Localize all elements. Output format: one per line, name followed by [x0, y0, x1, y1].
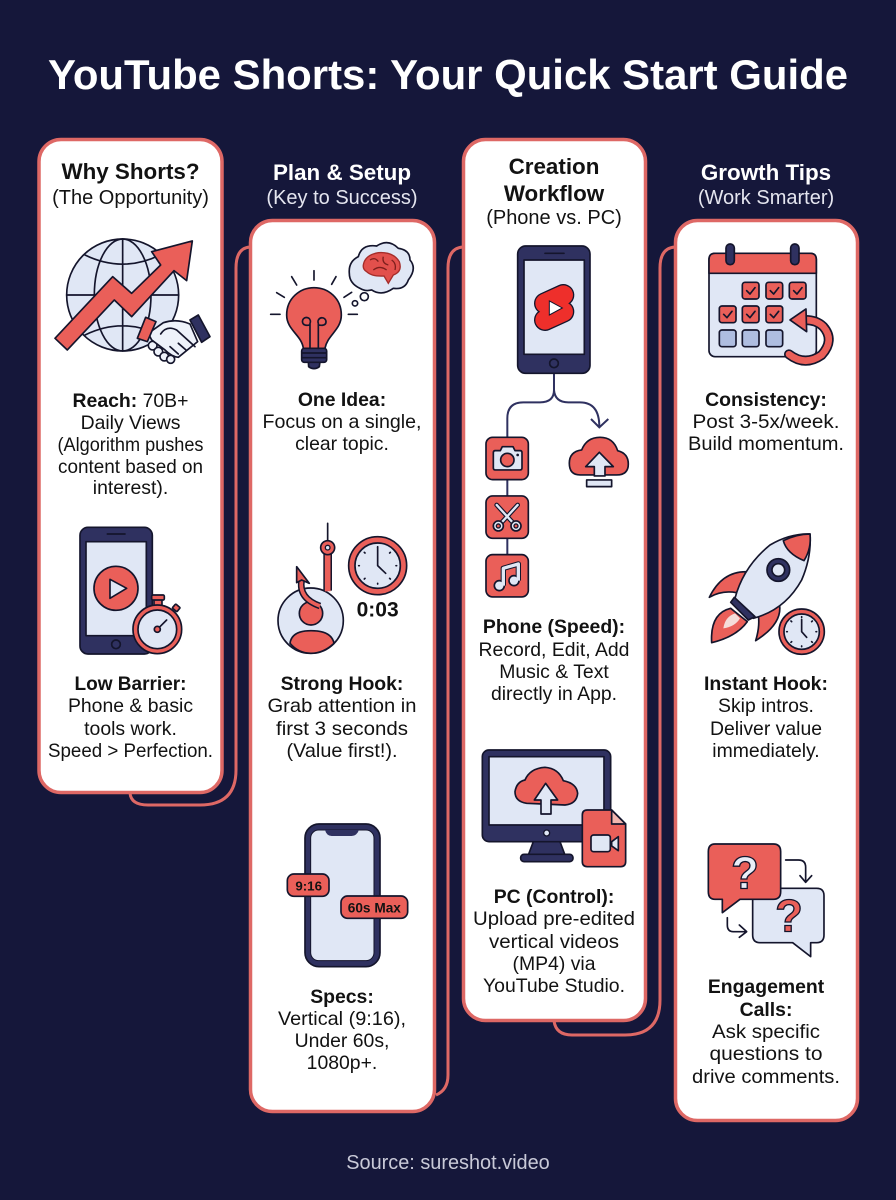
- text: phone speed: Phone (Speed):: [483, 616, 625, 638]
- heading: (Work Smarter): [698, 187, 834, 209]
- panel: plan and setup: [250, 160, 463, 1112]
- heading: [698, 160, 834, 209]
- text: engagement calls: Calls:: [740, 999, 792, 1021]
- panel: creation workflow: [464, 140, 675, 1035]
- text: consistency: [688, 389, 844, 455]
- text: specs: Under 60s,: [295, 1030, 389, 1052]
- heading: Why Shorts?: [61, 159, 200, 184]
- icon: question speech bubbles: ?: [775, 891, 803, 942]
- icon: question speech bubbles: ?: [731, 847, 759, 898]
- connector to creation workflow: [436, 247, 463, 1095]
- text: consistency: Build momentum.: [688, 433, 844, 455]
- heading: Plan & Setup: [273, 160, 411, 185]
- text: strong hook: (Value first!).: [286, 740, 398, 762]
- card: [39, 140, 222, 792]
- text: reach: (Algorithm pushes: [58, 434, 204, 456]
- text: instant hook: immediately.: [712, 740, 820, 762]
- text: one idea: [262, 389, 422, 455]
- text: reach: interest).: [93, 477, 168, 499]
- text: strong hook: [268, 673, 416, 762]
- icon: desktop monitor with cloud upload and video file: [482, 750, 626, 867]
- text: one idea: One Idea:: [298, 389, 386, 411]
- text: instant hook: Skip intros.: [718, 695, 814, 717]
- text: engagement calls: drive comments.: [692, 1066, 840, 1088]
- text: low barrier: Speed > Perfection.: [48, 740, 213, 762]
- text: pc control: (MP4) via: [513, 953, 596, 975]
- text: engagement calls: Ask specific: [712, 1021, 820, 1043]
- panel: why shorts: [39, 140, 250, 805]
- card: [676, 220, 858, 1120]
- title: YouTube Shorts: Your Quick Start Guide: [48, 51, 848, 98]
- text: low barrier: Phone & basic: [68, 695, 193, 717]
- heading: Creation: [509, 154, 599, 179]
- text: specs: Vertical (9:16),: [278, 1008, 406, 1030]
- text: one idea: clear topic.: [295, 433, 389, 455]
- card: [464, 140, 646, 1020]
- text: instant hook: [704, 673, 828, 762]
- heading: (Phone vs. PC): [486, 207, 622, 229]
- text: phone speed: [479, 616, 629, 705]
- text: pc control: vertical videos: [489, 931, 619, 953]
- text: engagement calls: Engagement: [708, 976, 825, 998]
- icon: hook, person and clock: 0:03: [357, 599, 399, 622]
- connector to plan and setup: [130, 247, 250, 805]
- connector to growth tips: [554, 247, 675, 1035]
- icon: rocket with clock: [709, 534, 824, 654]
- icon: vertical phone specs: 9:16: [295, 878, 322, 893]
- text: one idea: Focus on a single,: [262, 411, 422, 433]
- text: instant hook: Deliver value: [710, 718, 822, 740]
- icon: globe with rising arrow and handshake: [55, 239, 210, 363]
- heading: [266, 160, 418, 209]
- text: instant hook: Instant Hook:: [704, 673, 828, 695]
- text: consistency: Post 3-5x/week.: [692, 411, 840, 433]
- text: specs: Specs:: [310, 986, 374, 1008]
- icon: phone workflow with shorts logo, tools and upload: [486, 246, 628, 597]
- text: engagement calls: questions to: [710, 1043, 822, 1065]
- text: low barrier: Low Barrier:: [74, 673, 186, 695]
- text: engagement calls: [692, 976, 840, 1088]
- panel: growth tips: [676, 160, 858, 1120]
- text: specs: 1080p+.: [307, 1052, 377, 1074]
- text: reach: [58, 390, 204, 499]
- icon: calendar with checkmarks and return arrow: [709, 244, 829, 361]
- text: reach: content based on: [58, 456, 203, 478]
- text: specs: [278, 986, 406, 1074]
- icon: light bulb with thought bubble: [271, 243, 413, 369]
- heading: Workflow: [504, 181, 605, 206]
- text: phone speed: directly in App.: [491, 683, 617, 705]
- heading: [486, 154, 622, 229]
- text: reach: Daily Views: [81, 412, 180, 434]
- card: [250, 220, 434, 1112]
- heading: (Key to Success): [266, 187, 418, 209]
- text: pc control: YouTube Studio.: [483, 975, 625, 997]
- heading: Growth Tips: [701, 160, 831, 185]
- text: phone speed: Record, Edit, Add: [479, 639, 629, 661]
- text: pc control: [473, 886, 635, 997]
- text: strong hook: Strong Hook:: [281, 673, 403, 695]
- icon: question speech bubbles: [708, 844, 824, 957]
- icon: vertical phone specs: [287, 824, 408, 967]
- text: pc control: Upload pre-edited: [473, 908, 635, 930]
- text: pc control: PC (Control):: [494, 886, 614, 908]
- heading: (The Opportunity): [52, 187, 209, 209]
- text: low barrier: tools work.: [84, 718, 177, 740]
- source credit: Source: sureshot.video: [346, 1152, 550, 1174]
- text: low barrier: [48, 673, 213, 762]
- text: strong hook: Grab attention in: [268, 695, 416, 717]
- text: strong hook: first 3 seconds: [276, 718, 408, 740]
- heading: [52, 159, 209, 209]
- text: consistency: Consistency:: [705, 389, 827, 411]
- icon: hook, person and clock: [278, 523, 407, 653]
- icon: phone with play button and stopwatch: [80, 527, 182, 654]
- icon: vertical phone specs: 60s Max: [348, 900, 401, 915]
- text: phone speed: Music & Text: [499, 661, 609, 683]
- text: reach: Reach: 70B+: [73, 390, 188, 412]
